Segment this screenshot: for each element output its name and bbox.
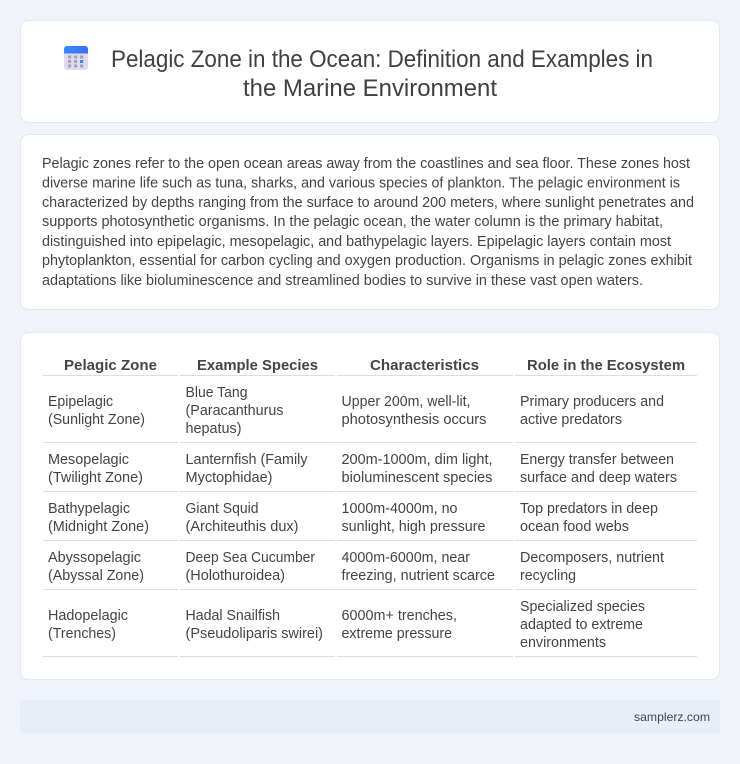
row: bathypelagic: ocean food webs <box>520 519 629 535</box>
row: bathypelagic: Giant Squid <box>186 501 258 517</box>
row: mesopelagic: 200m-1000m, dim light, <box>342 452 492 468</box>
row: abyssopelagic: 4000m-6000m, near <box>342 550 470 566</box>
text block: description paragraph: adaptations like bioluminescence and streamlined bodies to survive in these vast open waters. <box>42 273 643 289</box>
text block: description paragraph: diverse marine life such as tuna, sharks, and various species of plankton. The pelagic environment is <box>42 176 680 192</box>
row: hadopelagic: Hadal Snailfish <box>186 608 280 624</box>
row: epipelagic: photosynthesis occurs <box>342 412 486 428</box>
row: epipelagic: (Sunlight Zone) <box>48 412 145 428</box>
row: hadopelagic: adapted to extreme <box>520 617 643 633</box>
row: epipelagic: Primary producers and <box>520 394 664 410</box>
row: mesopelagic: Mesopelagic <box>48 452 129 468</box>
row: bathypelagic: 1000m-4000m, no <box>342 501 458 517</box>
row: hadopelagic <box>48 599 645 651</box>
row: bathypelagic: (Architeuthis dux) <box>186 519 298 535</box>
title card <box>20 20 720 122</box>
row: mesopelagic: bioluminescent species <box>342 470 492 486</box>
table header <box>64 358 685 374</box>
row: hadopelagic: environments <box>520 635 606 651</box>
row: mesopelagic: Lanternfish (Family <box>186 452 308 468</box>
table header: Pelagic Zone <box>64 358 157 374</box>
row: mesopelagic: (Twilight Zone) <box>48 470 143 486</box>
row: bathypelagic: sunlight, high pressure <box>342 519 486 535</box>
title: the Marine Environment <box>243 75 497 102</box>
row: mesopelagic: Energy transfer between <box>520 452 674 468</box>
icon: calendar <box>64 46 88 70</box>
table header: Example Species <box>197 358 318 374</box>
row: mesopelagic: Myctophidae) <box>186 470 272 486</box>
row: hadopelagic: Hadopelagic <box>48 608 128 624</box>
row: abyssopelagic: freezing, nutrient scarce <box>342 568 495 584</box>
row: bathypelagic <box>48 501 658 535</box>
row: bathypelagic: Bathypelagic <box>48 501 130 517</box>
title <box>111 46 653 102</box>
table header: Characteristics <box>370 358 479 374</box>
row: abyssopelagic: (Abyssal Zone) <box>48 568 144 584</box>
table header: Role in the Ecosystem <box>527 358 685 374</box>
row: hadopelagic: (Trenches) <box>48 626 116 642</box>
panel: description <box>20 134 720 310</box>
row: bathypelagic: (Midnight Zone) <box>48 519 149 535</box>
text block: description paragraph: characterized by depths ranging from the surface to around 200 meters, where sunlight penetrates and <box>42 195 694 211</box>
row: abyssopelagic: recycling <box>520 568 576 584</box>
row: abyssopelagic: Decomposers, nutrient <box>520 550 664 566</box>
text block: description paragraph: supports photosynthetic organisms. In the pelagic ocean, the water column is the primary habitat, <box>42 214 663 230</box>
row: bathypelagic: Top predators in deep <box>520 501 658 517</box>
text block: description paragraph <box>42 156 694 289</box>
title: Pelagic Zone in the Ocean: Definition and Examples in <box>111 46 653 73</box>
row: epipelagic: Upper 200m, well-lit, <box>342 394 470 410</box>
row: epipelagic: (Paracanthurus <box>186 403 284 419</box>
row: mesopelagic: surface and deep waters <box>520 470 677 486</box>
row: hadopelagic: Specialized species <box>520 599 645 615</box>
row: hadopelagic: extreme pressure <box>342 626 452 642</box>
panel: pelagic zones table <box>20 332 720 680</box>
text block: description paragraph: Pelagic zones refer to the open ocean areas away from the coastlines and sea floor. These zones host <box>42 156 690 172</box>
row: abyssopelagic: (Holothuroidea) <box>186 568 285 584</box>
text block: description paragraph: phytoplankton, essential for carbon cycling and oxygen production. Organisms in pelagic zones exhibit <box>42 253 692 269</box>
row: epipelagic: active predators <box>520 412 622 428</box>
row: epipelagic: hepatus) <box>186 421 242 437</box>
row: abyssopelagic: Deep Sea Cucumber <box>186 550 315 566</box>
footer text: samplerz.com <box>634 710 710 724</box>
row: abyssopelagic: Abyssopelagic <box>48 550 141 566</box>
row: epipelagic <box>48 385 664 437</box>
row: hadopelagic: (Pseudoliparis swirei) <box>186 626 323 642</box>
row: abyssopelagic <box>48 550 664 584</box>
row: epipelagic: Epipelagic <box>48 394 113 410</box>
row: epipelagic: Blue Tang <box>186 385 248 401</box>
text block: description paragraph: distinguished into epipelagic, mesopelagic, and bathypelagic layers. Epipelagic layers contain most <box>42 234 671 250</box>
row: hadopelagic: 6000m+ trenches, <box>342 608 457 624</box>
row: mesopelagic <box>48 452 677 486</box>
footer bar <box>20 700 720 734</box>
